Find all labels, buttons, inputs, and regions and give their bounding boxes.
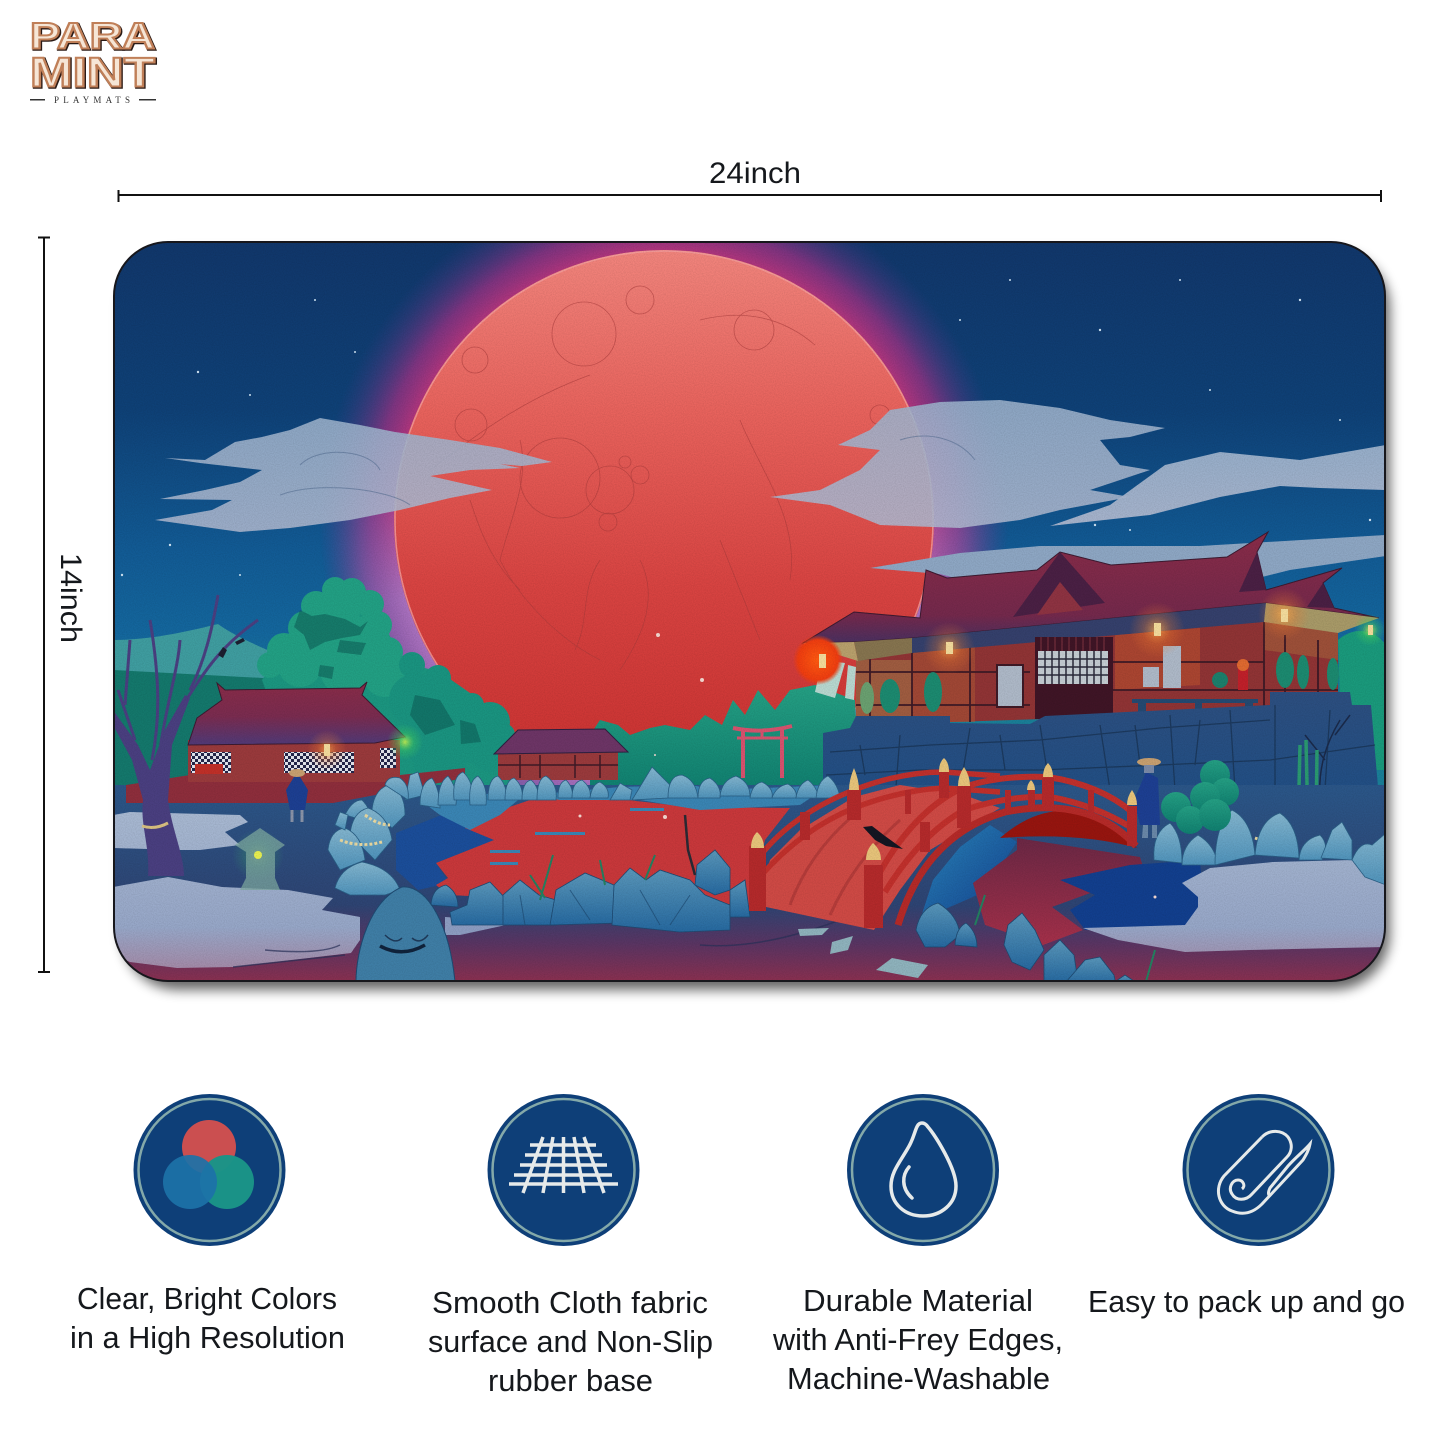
rocks: far right bank (1154, 810, 1386, 885)
caption: cloth fabric (428, 1285, 713, 1398)
left building (126, 682, 465, 803)
arch underside (1000, 811, 1137, 848)
night sky (113, 241, 1386, 801)
deck (757, 785, 1000, 930)
forest: centre treeline (590, 685, 860, 790)
tree rope (142, 823, 168, 827)
feature: durable (772, 1094, 1063, 1396)
caption: durable (772, 1283, 1063, 1396)
wandering monk with straw hat (1134, 758, 1161, 838)
stone ghost figure (356, 887, 455, 982)
lake: reflections (420, 785, 830, 865)
reeds (530, 855, 1155, 985)
moon craters (430, 286, 890, 670)
far railing (757, 772, 1000, 880)
temple: door (1035, 637, 1113, 719)
width dimension: 24inch (118, 157, 1381, 202)
playmat illustration (113, 175, 1386, 985)
red arched bridge (749, 758, 1137, 930)
cloud: low behind temple (870, 535, 1384, 577)
crow on post (863, 826, 903, 849)
temple: small gables (1239, 552, 1334, 608)
icon: water drop (847, 1094, 999, 1246)
deck shadow bands (790, 810, 900, 915)
logo: Paramint Playmats (30, 16, 156, 105)
ground patch: top left (113, 812, 248, 850)
rocks: front ridge lines (520, 890, 690, 925)
lattice windows (191, 748, 396, 773)
caption: durable: with Anti-Frey Edges, (772, 1322, 1063, 1357)
temple: wall window and notices (997, 646, 1181, 707)
logo: Paramint Playmats: PARA (31, 16, 156, 58)
temple: lanterns (793, 588, 1386, 685)
logo: Paramint Playmats: PARA (30, 16, 155, 56)
feature: colors (70, 1094, 345, 1355)
paper grain (113, 241, 1386, 982)
offering flames (195, 764, 223, 774)
mat border (114, 242, 1385, 981)
temple: left curtain (815, 660, 856, 700)
feature: cloth fabric (428, 1094, 713, 1398)
forest: right of temple (1338, 631, 1386, 770)
caption: cloth fabric: rubber base (488, 1363, 653, 1398)
stone lantern (232, 828, 285, 890)
ground patch: beside stone figure (445, 917, 520, 935)
cloud: left (155, 418, 552, 532)
bare left tree (113, 595, 258, 876)
caption: portable: Easy to pack up and go (1088, 1284, 1405, 1319)
caption: cloth fabric: surface and Non-Slip (428, 1324, 713, 1359)
roof (188, 682, 405, 745)
bushes beside bridge (1161, 760, 1239, 834)
temple: lattice window (1038, 651, 1108, 684)
lake: red (436, 797, 790, 910)
fireflies (578, 633, 1156, 898)
caption: durable: Machine-Washable (787, 1361, 1050, 1396)
icon: three overlapping colour circles (134, 1094, 286, 1246)
rocks: back row (405, 767, 840, 808)
stars (121, 279, 1371, 576)
rope charms (340, 815, 1298, 845)
caption: colors: Clear, Bright Colors (77, 1281, 337, 1316)
tree shadow texture (294, 610, 481, 744)
rocks: right of bridge (916, 903, 1140, 985)
icon: rolled mat (1182, 1094, 1334, 1246)
temple: eave underside (803, 603, 1379, 661)
rocks: left cluster (328, 777, 408, 895)
ground patch: bottom left (113, 877, 360, 968)
cloud detail lines (280, 436, 975, 505)
mat shadow (122, 252, 1390, 990)
temple: stone wall (823, 692, 1378, 810)
logo: Paramint Playmats: MINT (31, 50, 156, 96)
rocks: front row (431, 850, 750, 932)
right blue water (1060, 860, 1205, 930)
post caps (751, 758, 1137, 860)
temple: roof (803, 532, 1379, 643)
lanterns (307, 730, 347, 770)
moon (394, 250, 934, 735)
bamboo (1298, 740, 1317, 830)
temple: gable (1013, 552, 1105, 617)
caption: colors (70, 1281, 345, 1355)
feature: portable (1088, 1094, 1405, 1319)
ground patch: right (1083, 860, 1386, 952)
temple: walls (856, 618, 1338, 725)
bottom ground curve lines (233, 920, 840, 967)
cloud: far right (1050, 445, 1386, 526)
torii gate (733, 726, 792, 778)
small building (494, 729, 628, 780)
ground (113, 785, 1386, 985)
near railing (880, 777, 1132, 892)
far mountain (115, 624, 268, 678)
height dimension: 14inch: 14inch (54, 553, 87, 643)
temple: offering bench and bonsai (1132, 659, 1258, 712)
icon: woven grid (488, 1094, 640, 1246)
walls (188, 740, 400, 782)
caption: colors: in a High Resolution (70, 1320, 345, 1355)
moon halo (327, 243, 1001, 785)
logo: Paramint Playmats: MINT (30, 48, 155, 96)
height dimension: 14inch (38, 237, 87, 972)
logo: Paramint Playmats: PLAYMATS (54, 95, 130, 105)
rail posts (749, 772, 1137, 928)
left figure (286, 769, 308, 822)
deck (126, 768, 465, 803)
lake: blue left (396, 812, 500, 890)
arch beam (898, 808, 1136, 925)
katana in lake (685, 815, 695, 875)
moon halo: lavender lower part (335, 511, 992, 785)
crows on branch (218, 638, 245, 658)
temple: potted plants (860, 652, 1339, 714)
water under bridge (920, 825, 1017, 920)
maroon reflection (973, 838, 1145, 945)
caption: cloth fabric: Smooth Cloth fabric (432, 1285, 708, 1320)
caption: durable: Durable Material (803, 1283, 1033, 1318)
forest: left (113, 577, 515, 794)
scattered papers (798, 928, 928, 978)
width dimension: 24inch: 24inch (709, 157, 801, 190)
cloud: right (770, 400, 1165, 528)
bare tree on wall (1305, 715, 1350, 800)
